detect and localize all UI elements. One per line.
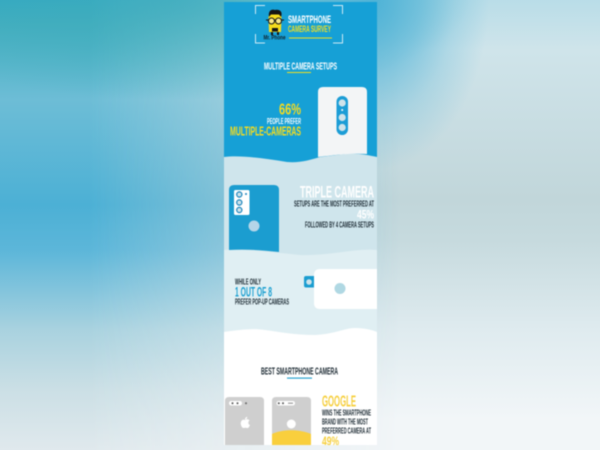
phone: blue back with triple camera — [229, 185, 279, 252]
phone: white back with vertical camera — [318, 87, 367, 157]
text block: triple camera: TRIPLE CAMERA — [300, 182, 374, 202]
stat: 66 percent — [230, 102, 301, 138]
stat: 66 percent: MULTIPLE-CAMERAS — [230, 124, 301, 138]
phone: gray apple — [225, 397, 264, 450]
heading: best smartphone camera: BEST SMARTPHONE CAMERA — [261, 366, 338, 378]
icon: mascot — [266, 10, 284, 35]
panel contents — [224, 2, 377, 450]
logo title: SMARTPHONE — [288, 14, 331, 26]
text block: pop-up cameras: WHILE ONLY — [235, 278, 261, 286]
text block: triple camera — [294, 182, 374, 230]
section: blue header background — [224, 2, 377, 172]
heading: best smartphone camera — [261, 366, 338, 379]
section: white wave background — [224, 328, 377, 445]
phone: pop-up camera — [304, 269, 377, 309]
text block: pop-up cameras — [235, 278, 289, 306]
stat: 66 percent: 66% — [279, 102, 301, 118]
mascot label: Mr. Phone — [264, 36, 286, 42]
text block: google: PREFERRED CAMERA AT — [322, 426, 371, 436]
text block: pop-up cameras: 1 OUT OF 8 — [235, 284, 272, 300]
logo subtitle: CAMERA SURVEY — [288, 24, 331, 34]
text block: google: WINS THE SMARTPHONE — [322, 408, 371, 418]
infographic panel — [223, 2, 378, 446]
section: pale wave background — [224, 154, 377, 260]
frame brackets — [256, 6, 342, 43]
section: lighter wave background — [224, 250, 377, 340]
icon: apple logo — [241, 417, 250, 428]
header logo — [256, 6, 342, 43]
heading: multiple camera setups — [264, 62, 337, 73]
text block: google: 49% — [322, 434, 339, 448]
phone: gray google — [272, 397, 311, 450]
text block: pop-up cameras: PREFER POP-UP CAMERAS — [235, 298, 289, 306]
logo underline — [289, 38, 332, 39]
heading: multiple camera setups: MULTIPLE CAMERA SETUPS — [264, 62, 337, 72]
stat: 66 percent: PEOPLE PREFER — [267, 117, 301, 126]
text block: google: GOOGLE — [322, 394, 356, 410]
background left tint — [0, 0, 380, 450]
text block: google — [322, 394, 371, 448]
text block: triple camera: FOLLOWED BY 4 CAMERA SETUPS — [305, 220, 374, 230]
text block: triple camera: SETUPS ARE THE MOST PREFERRED AT — [294, 200, 374, 208]
text block: google: BRAND WITH THE MOST — [322, 418, 368, 426]
text block: triple camera: 45% — [357, 208, 374, 222]
